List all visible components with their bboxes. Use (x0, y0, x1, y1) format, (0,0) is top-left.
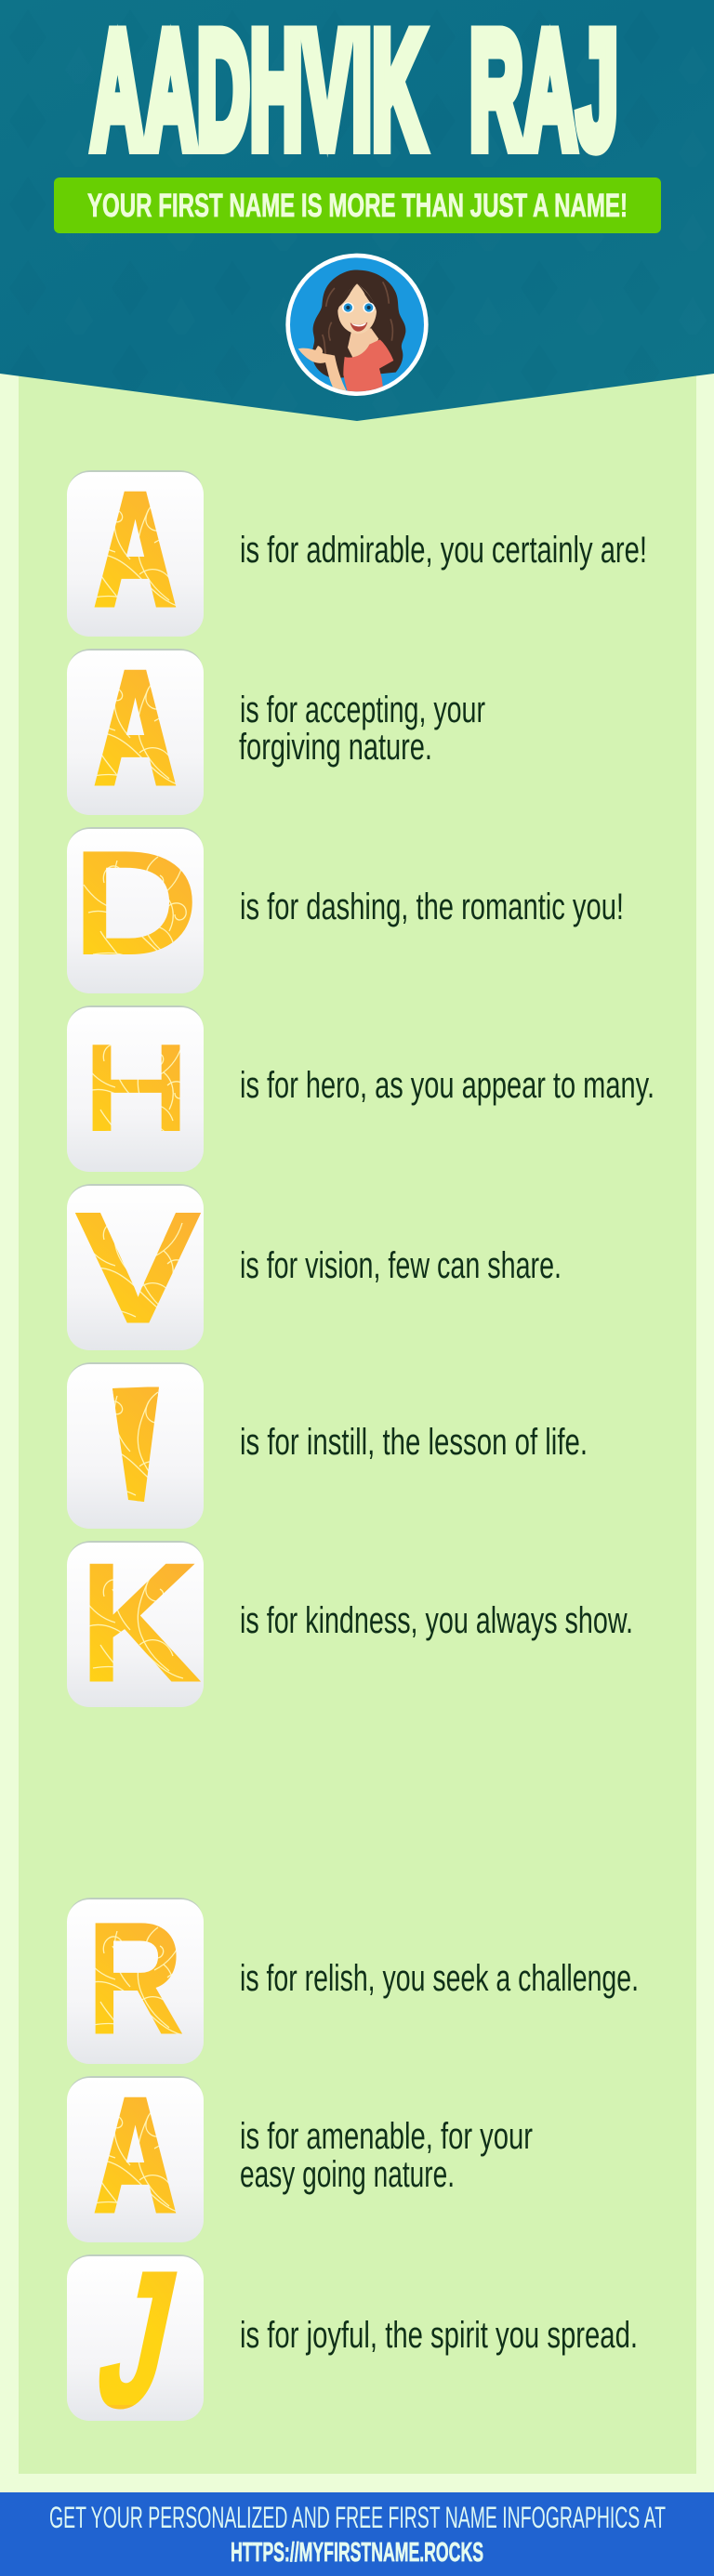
letter card (67, 649, 204, 815)
row: V vision (67, 1184, 562, 1352)
text: is for accepting, your (240, 690, 485, 730)
row: R relish (67, 1893, 639, 2064)
title (91, 0, 618, 183)
footer url: HTTPS://MYFIRSTNAME.ROCKS (231, 2538, 483, 2568)
letter card (67, 2076, 204, 2242)
letter card (67, 1362, 204, 1529)
row: A amenable (67, 2064, 533, 2245)
letter card (67, 827, 204, 993)
letter card (67, 1541, 204, 1707)
letter card (67, 1898, 204, 2064)
letter I: I (90, 1352, 181, 1537)
content panel (19, 353, 696, 2474)
row: A admirable (67, 458, 647, 639)
letter A: A (94, 637, 177, 818)
letter card (67, 470, 204, 637)
letter card (67, 1184, 204, 1350)
row: D dashing (67, 824, 624, 993)
text: forgiving nature. (239, 727, 432, 768)
letter card (67, 2254, 204, 2421)
text (240, 2116, 533, 2195)
avatar (285, 254, 429, 396)
letter R: R (87, 1893, 183, 2063)
text: is for vision, few can share. (240, 1245, 562, 1286)
letter A: A (94, 2064, 177, 2245)
row: A accepting (67, 637, 485, 818)
letter card (67, 1005, 204, 1172)
letter H: H (83, 1021, 190, 1155)
text: is for instill, the lesson of life. (240, 1422, 588, 1463)
footer (0, 2492, 714, 2576)
letter A: A (94, 458, 177, 639)
letter K: K (79, 1531, 195, 1713)
text: easy going nature. (240, 2154, 455, 2195)
row: J joyful (67, 2232, 638, 2446)
tagline bar (54, 177, 661, 233)
text (239, 690, 485, 768)
text: is for amenable, for your (240, 2116, 533, 2157)
row: K kindness (67, 1531, 633, 1713)
title: AADHVIK (91, 0, 425, 183)
letter V: V (80, 1184, 196, 1352)
title: RAJ (469, 0, 618, 183)
header banner (0, 0, 714, 421)
letter J: J (84, 2232, 192, 2446)
letter D: D (73, 824, 197, 982)
row: I instill (67, 1352, 588, 1537)
row: H hero (67, 1005, 654, 1172)
